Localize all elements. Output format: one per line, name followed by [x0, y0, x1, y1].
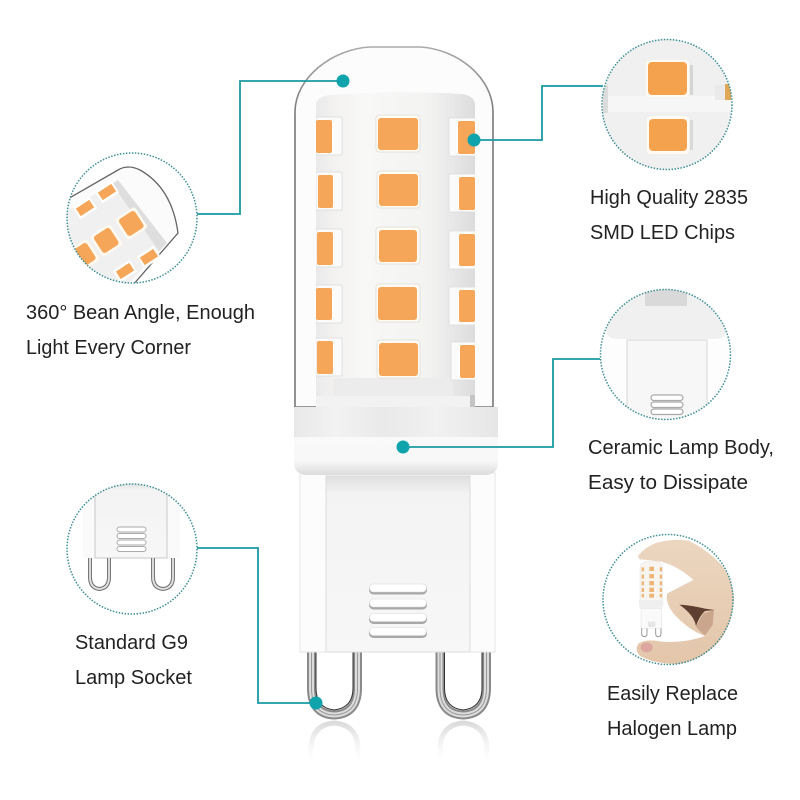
text: 360 degree beam angle: Light Every Corner — [26, 337, 191, 359]
LED chips: right column — [449, 118, 477, 380]
miniature bulb — [640, 562, 663, 602]
callout dot: pin — [310, 696, 322, 710]
LED chips: centre column — [376, 115, 420, 378]
text: G9 socket — [75, 632, 192, 689]
callout dot: dome — [336, 74, 350, 88]
ceramic LED core — [316, 88, 477, 408]
text: 360 degree beam angle: 360° Bean Angle, Enough — [26, 302, 255, 324]
text: ceramic lamp body: Ceramic Lamp Body, — [588, 437, 774, 459]
detail circle: 360 degree beam angle — [60, 153, 197, 285]
text: ceramic lamp body — [588, 437, 774, 494]
text: 360 degree beam angle — [26, 302, 255, 359]
base vents — [369, 584, 427, 638]
text: LED chips: High Quality 2835 — [590, 187, 748, 209]
LED chips: left column — [316, 117, 342, 376]
text: replace halogen: Easily Replace — [607, 683, 738, 705]
central G9 bulb illustration — [294, 47, 498, 762]
ceramic collar — [294, 407, 498, 475]
text: ceramic lamp body: Easy to Dissipate — [588, 472, 748, 494]
detail circle: ceramic lamp body — [600, 288, 732, 425]
text: G9 socket: Standard G9 — [75, 632, 188, 654]
callout dot: collar — [396, 440, 410, 454]
text: LED chips: SMD LED Chips — [590, 222, 735, 244]
text: G9 socket: Lamp Socket — [75, 667, 192, 689]
text: replace halogen: Halogen Lamp — [607, 718, 737, 740]
pin reflections — [311, 723, 487, 762]
hand — [637, 540, 734, 664]
glass envelope — [295, 47, 493, 407]
callout lines — [197, 81, 603, 703]
callout dot: LED chip — [468, 134, 480, 146]
metal pins — [312, 652, 486, 715]
detail circle: hand holding bulb — [603, 534, 734, 664]
detail circle: SMD LED chips — [600, 38, 735, 172]
text: LED chips — [590, 187, 748, 244]
text: replace halogen — [607, 683, 738, 740]
detail circle: standard G9 socket — [67, 482, 197, 614]
plastic base — [300, 473, 495, 652]
